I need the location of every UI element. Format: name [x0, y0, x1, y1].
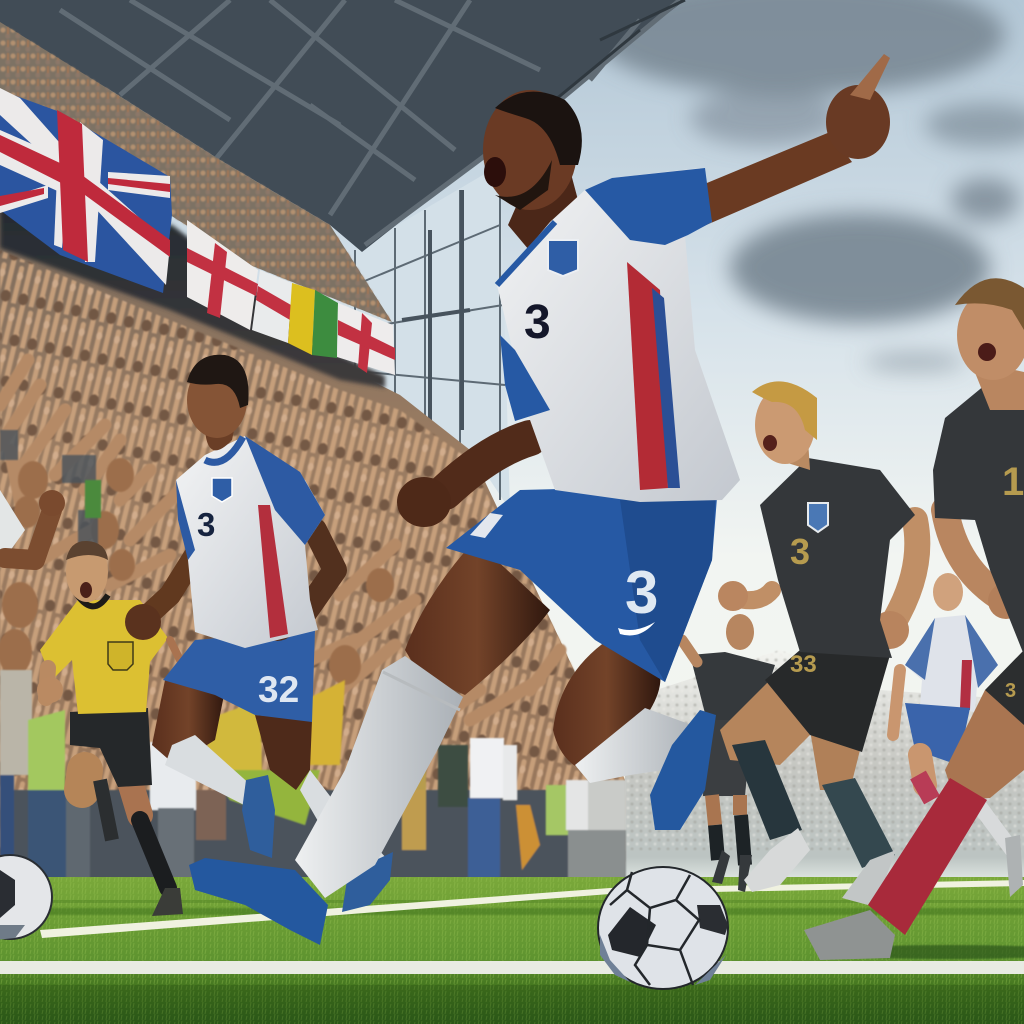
player 3 in white and blue kit: 32	[258, 669, 299, 710]
main player raised arm	[690, 54, 890, 232]
football, left edge	[0, 855, 52, 940]
stadium roof	[0, 0, 685, 252]
player in dark kit with crest: 33	[790, 651, 817, 678]
referee legs	[82, 770, 183, 916]
pitch	[0, 877, 1024, 1024]
storm clouds	[595, 0, 1024, 371]
main player jumping	[189, 54, 890, 945]
main player jumping: 3	[524, 296, 551, 349]
flag: union flag	[0, 88, 172, 293]
player in dark kit, right edge	[804, 278, 1024, 960]
referee in yellow	[37, 541, 183, 916]
far stand crowd	[625, 650, 1024, 880]
small player in black, background	[682, 614, 775, 892]
upper crowd tier	[0, 22, 392, 322]
glazed stand wall	[340, 165, 510, 510]
standing spectators lower row	[0, 670, 626, 883]
football, foreground	[598, 867, 728, 989]
player in dark kit with crest	[718, 381, 917, 905]
player in dark kit, right edge: 3	[1005, 680, 1016, 702]
player 3 legs	[152, 680, 393, 912]
main player legs	[189, 540, 716, 945]
dark player legs	[720, 680, 896, 905]
player 3 in white and blue kit: 3	[197, 506, 215, 543]
main player left arm	[397, 438, 530, 527]
main player jumping: 3	[625, 559, 658, 626]
crowd faces	[0, 458, 394, 685]
bunting flags	[187, 220, 395, 375]
main crowd stand	[0, 205, 625, 885]
player in dark kit with crest: 3	[790, 531, 810, 572]
small player in white, background	[893, 573, 1023, 897]
player 3 in white and blue kit	[125, 355, 393, 912]
